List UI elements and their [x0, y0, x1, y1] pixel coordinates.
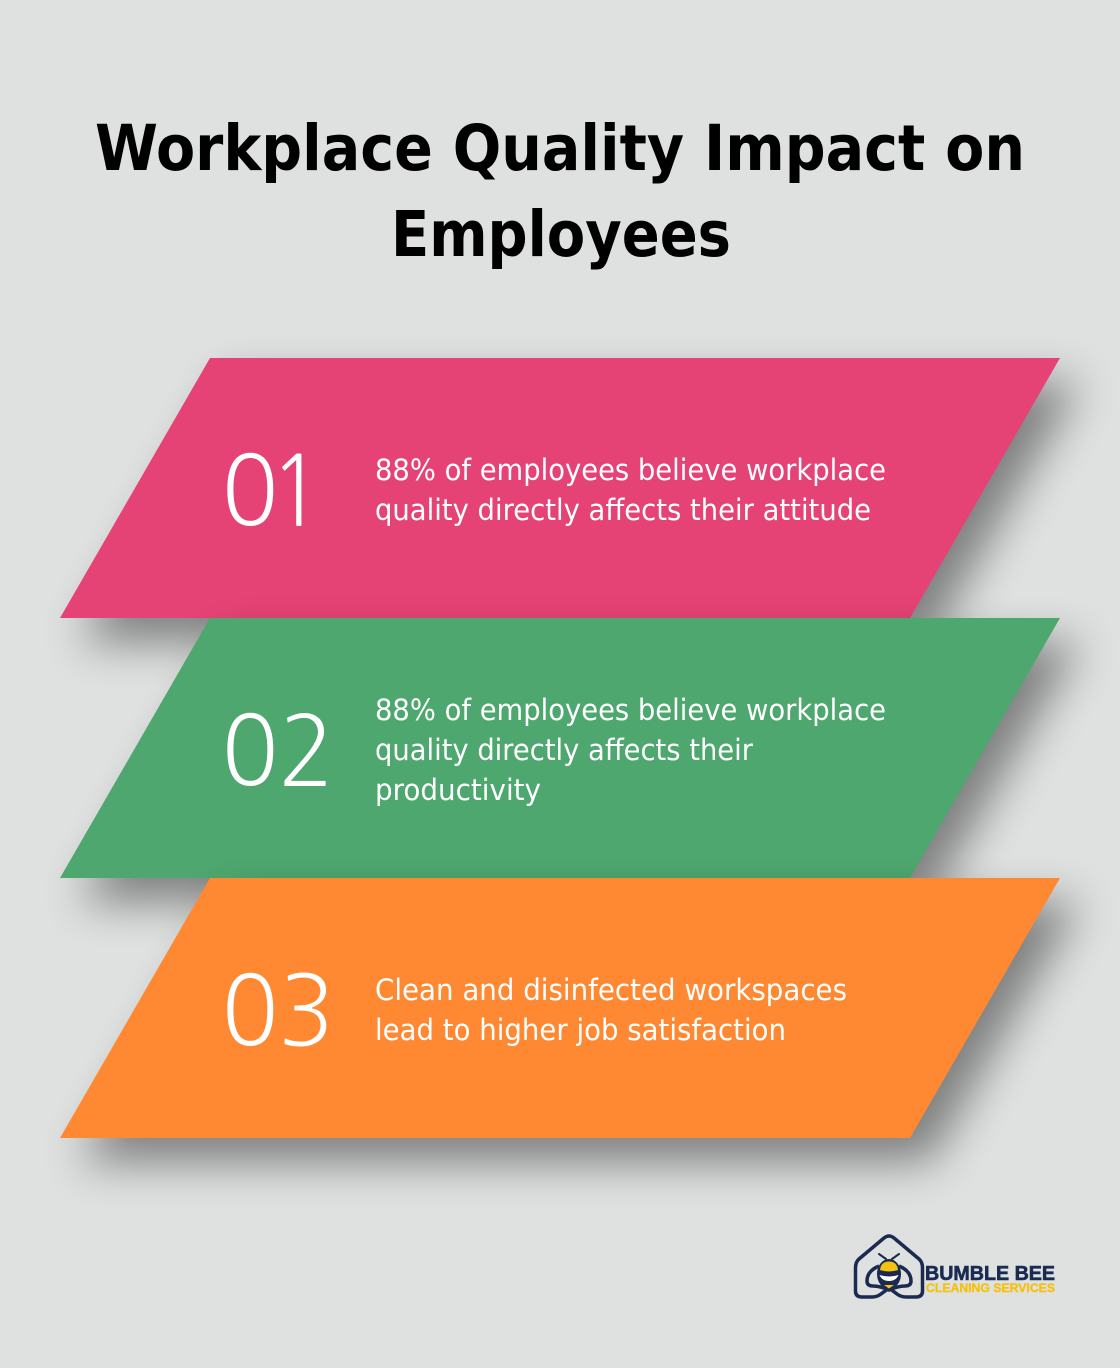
text: step 03: lead to higher job satisfaction: [375, 1013, 786, 1047]
panel: step 02: [60, 618, 1080, 902]
text: step 02: 88% of employees believe workplace: [375, 693, 886, 727]
title: [95, 112, 1025, 271]
number 01: 0: [221, 443, 279, 541]
title: Employees: [391, 198, 731, 271]
text: step 02: [375, 693, 886, 807]
number 01: 1: [269, 443, 323, 541]
text: step 02: quality directly affects their: [375, 733, 753, 767]
title: Workplace Quality Impact on: [95, 112, 1025, 185]
number 02: 0: [221, 703, 279, 801]
parallelogram: pink: [60, 358, 1060, 618]
parallelogram: orange: [60, 878, 1060, 1138]
icon: house with bee: [856, 1236, 922, 1297]
text: step 01: [375, 453, 886, 527]
text: step 01: quality directly affects their attitude: [375, 493, 871, 527]
number 03: 3: [278, 963, 335, 1061]
panel: step 01: [60, 358, 1080, 642]
text: step 02: productivity: [375, 773, 541, 807]
parallelogram: green: [60, 618, 1060, 878]
tagline: CLEANING SERVICES: [926, 1281, 1055, 1295]
number 02: 2: [278, 703, 335, 801]
text: step 03: Clean and disinfected workspaces: [375, 973, 847, 1007]
wordmark: BUMBLE BEE: [925, 1263, 1055, 1285]
logo: Bumble Bee Cleaning Services: [856, 1236, 1055, 1297]
panel: step 03: [60, 878, 1080, 1162]
number 03: 0: [221, 963, 279, 1061]
text: step 03: [375, 973, 847, 1047]
text: step 01: 88% of employees believe workplace: [375, 453, 886, 487]
